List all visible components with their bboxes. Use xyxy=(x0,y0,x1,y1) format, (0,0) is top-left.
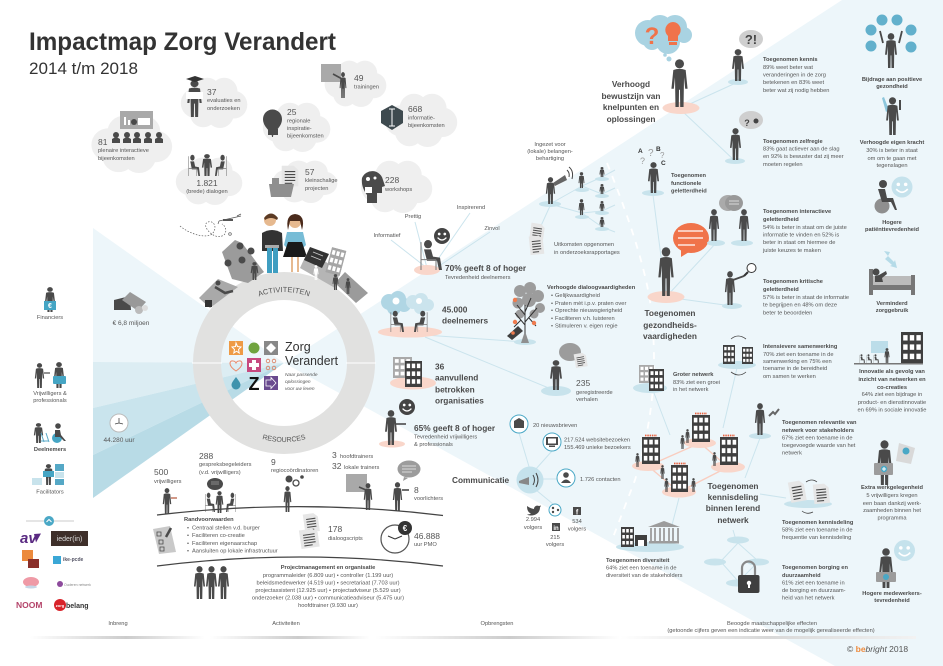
outcome: toegenomen gezondheidsvaardigheden xyxy=(643,223,709,341)
outcome: dialoogvaardigheden tree: Gelijkwaardigheid xyxy=(555,293,600,299)
outcome: toegenomen kennis: 89% weet beter wat xyxy=(763,65,813,71)
outcome: communicatie: volgers xyxy=(524,525,542,531)
societal: verminderd zorggebruik: zorggebruik xyxy=(876,308,909,314)
cloud: 668 informatiebijeenkomsten: informatie- xyxy=(408,116,435,122)
logo: Zorg Verandert: Verandert xyxy=(285,354,339,368)
outcome: ingezet belangenbehartiging: Uitkomsten opgenomen xyxy=(554,242,614,248)
178 dialoogscripts xyxy=(299,513,363,549)
outcome: functionele geletterdheid: C xyxy=(661,160,666,167)
cloud: 57 kleinschalige projecten: projecten xyxy=(305,186,328,192)
outcome: verhoogd bewustzijn: Verhoogd xyxy=(612,79,650,89)
icon: activity scene left xyxy=(199,240,264,308)
resources: 288 gespreksbegeleiders: gespreksbegeleiders xyxy=(199,462,252,468)
outcome: functionele geletterdheid xyxy=(638,146,707,196)
outcome: 70% tevredenheid deelnemers xyxy=(374,205,527,281)
resources: trainers: 3 xyxy=(332,450,337,460)
outcome: borging en duurzaamheid: de borging en duurzaam- xyxy=(782,588,846,594)
outcome: verhoogd bewustzijn xyxy=(601,15,700,124)
46.888 uur PMO xyxy=(381,521,440,553)
178 dialoogscripts: 178 xyxy=(328,524,342,534)
cloud: 25 regionale bijeenkomsten: regionale xyxy=(287,118,310,124)
resources: 9 regiocoordinatoren: regiocoördinatoren xyxy=(271,468,318,474)
outcome: dialoogvaardigheden tree xyxy=(507,282,636,345)
outcome: 65% tevredenheid vrijwilligers: Tevredenheid vrijwilligers xyxy=(414,434,477,440)
societal: verminderd zorggebruik xyxy=(869,251,915,314)
cloud: 25 regionale bijeenkomsten: bijeenkomsten xyxy=(287,134,324,140)
logos of partners: zorg xyxy=(56,603,65,608)
cloud: 57 kleinschalige projecten xyxy=(269,161,338,203)
outcome: relevantie netwerk: Toegenomen relevantie van xyxy=(782,420,857,426)
logos of partners: av xyxy=(20,530,38,547)
societal: hogere patienttevredenheid: patiënttevredenheid xyxy=(865,227,920,233)
outcome: 235 verhalen: geregistreerde xyxy=(576,390,613,396)
outcome: verhoogd bewustzijn: ? xyxy=(645,23,659,50)
societal: innovatie xyxy=(854,332,926,414)
outcome: dialoogvaardigheden tree: • xyxy=(551,324,553,330)
resources: 500 vrijwilligers: vrijwilligers xyxy=(154,479,182,485)
outcome: toegenomen diversiteit: diversiteit van de stakeholders xyxy=(606,573,683,579)
randvoorwaarden: Faciliteren eigenaarschap xyxy=(192,541,257,547)
outcome: relevantie netwerk: 67% ziet een toename in de xyxy=(782,436,853,442)
outcome: 235 verhalen xyxy=(541,343,613,403)
outcome: intensievere samenwerking: 70% ziet een toename in de xyxy=(763,352,834,358)
outcome: 45.000 deelnemers: deelnemers xyxy=(442,316,489,326)
outcome: groter netwerk xyxy=(633,365,720,393)
outcome: 70% tevredenheid deelnemers: Informatief xyxy=(374,233,401,239)
resources: 500 vrijwilligers xyxy=(154,467,182,514)
outcome: 65% tevredenheid vrijwilligers: & professionals xyxy=(414,442,453,448)
heading: kennisdeling binnen lerend netwerk: netwerk xyxy=(717,515,749,525)
ground arcs xyxy=(157,507,443,566)
background: left input fan xyxy=(93,228,284,498)
randvoorwaarden: Faciliteren co-creatie xyxy=(192,533,245,539)
outcome: kritische geletterdheid: te begrijpen en 48% om deze xyxy=(763,302,837,308)
societal: extra werkgelegenheid: een baan dankzij werk- xyxy=(863,501,921,507)
outcome: 36 organisaties: organisaties xyxy=(435,396,484,406)
input: financiers: Financiers xyxy=(37,315,63,321)
resources: 8 voorlichters: 8 xyxy=(414,485,419,495)
input: facilitators: Facilitators xyxy=(36,490,64,496)
cloud: 228 workshops xyxy=(361,161,432,213)
outcome: communicatie: 2.994 xyxy=(526,517,540,523)
cloud: 57 kleinschalige projecten: 57 xyxy=(305,167,315,177)
logo: Zorg Verandert: Zorg xyxy=(285,340,311,354)
outcome: groter netwerk: Groter netwerk xyxy=(673,372,714,378)
outcome: communicatie: 534 xyxy=(572,519,582,525)
outcome: kritische geletterdheid: Toegenomen kritische xyxy=(763,279,823,285)
outcome: intensievere samenwerking: samenwerking en 75% een xyxy=(763,359,832,365)
outcome: borging en duurzaamheid: Toegenomen borging en xyxy=(782,565,848,571)
outcome: communicatie: volgers xyxy=(546,542,564,548)
outcome: interactieve geletterdheid: juiste keuzes te maken xyxy=(762,248,821,254)
randvoorwaarden: • xyxy=(187,541,189,547)
outcome: toegenomen gezondheidsvaardigheden: vaardigheden xyxy=(643,331,697,341)
outcome: intensievere samenwerking xyxy=(718,336,838,380)
outcome: intensievere samenwerking: Intensievere samenwerking xyxy=(763,344,838,350)
footer labels: Opbrengsten xyxy=(481,621,513,627)
outcome: groter netwerk: in het netwerk xyxy=(673,387,709,393)
randvoorwaarden: Randvoorwaarden xyxy=(184,517,234,523)
outcome: toegenomen zelfregie: Toegenomen zelfregie xyxy=(763,139,823,145)
societal: bijdrage positieve gezondheid: gezondheid xyxy=(876,84,908,90)
subtitle: 2014 t/m 2018 xyxy=(29,60,138,78)
outcome: dialoogvaardigheden tree: Oprechte nieuwsgierigheid xyxy=(555,308,622,314)
outcome: relevantie netwerk xyxy=(749,403,857,456)
cloud: 37 evaluaties: 37 xyxy=(207,87,217,97)
societal: verhoogde eigen kracht: 30% is beter in staat xyxy=(866,148,918,154)
societal: innovatie: co-creaties xyxy=(877,385,907,391)
heading: kennisdeling binnen lerend netwerk: kennisdeling xyxy=(708,492,758,502)
societal: extra werkgelegenheid: 5 vrijwilligers kregen xyxy=(866,493,918,499)
resources: 288 gespreksbegeleiders: (v.d. vrijwilligers) xyxy=(199,470,241,476)
logos of partners: Ouderen netwerk xyxy=(64,583,91,587)
outcome: intensievere samenwerking: toename in de bereidheid xyxy=(763,366,827,372)
projectmanagement: hoofdtrainer (9.930 uur) xyxy=(298,603,358,609)
cloud: 49 trainingen: trainingen xyxy=(354,84,379,90)
resources: 9 regiocoordinatoren xyxy=(271,457,318,512)
resources: trainers: hoofdtrainers xyxy=(340,454,373,460)
footer gradient bar xyxy=(30,636,916,639)
outcome: functionele geletterdheid: A xyxy=(638,148,643,155)
cloud: 81 plenaire bijeenkomsten: bijeenkomsten xyxy=(98,156,135,162)
icon: drone with dashed route xyxy=(180,214,241,237)
outcome: ingezet belangenbehartiging: in onderzoeksrapportages xyxy=(554,250,620,256)
resources: 288 gespreksbegeleiders: 288 xyxy=(199,451,213,461)
logos of partners: ieder(in) xyxy=(57,536,82,543)
outcome: functionele geletterdheid: B xyxy=(656,146,661,153)
outcome: ingezet belangenbehartiging: (lokale) belangen- xyxy=(527,149,573,155)
cloud: 668 informatiebijeenkomsten: bijeenkomsten xyxy=(408,123,445,129)
outcome: kritische geletterdheid: beter te beoordelen xyxy=(763,310,812,316)
outcome: toegenomen kennis xyxy=(728,30,829,94)
outcome: ingezet belangenbehartiging: Ingezet voor xyxy=(534,142,566,148)
outcome: interactieve geletterdheid: informatie te vinden en 52% is xyxy=(763,232,839,238)
outcome: verhoogd bewustzijn: bewustzijn van xyxy=(601,91,661,101)
outcome: toegenomen gezondheidsvaardigheden: gezondheids- xyxy=(643,320,697,330)
outcome: functionele geletterdheid: ? xyxy=(648,148,654,159)
outcome: interactieve geletterdheid: geletterdheid xyxy=(763,217,799,223)
societal: verhoogde eigen kracht: Verhoogde eigen kracht xyxy=(860,140,924,146)
outcome: toegenomen kennis: beter wat zij nodig hebben xyxy=(763,88,829,94)
randvoorwaarden: • xyxy=(187,533,189,539)
outcome: toegenomen kennisdeling: 58% ziet een toename in de xyxy=(782,528,853,534)
resources: 8 voorlichters: voorlichters xyxy=(414,496,443,502)
outcome: toegenomen diversiteit: 64% ziet een toename in de xyxy=(606,566,677,572)
outcome: ingezet belangenbehartiging xyxy=(527,142,620,256)
outcome: communicatie xyxy=(452,415,631,548)
outcome: 70% tevredenheid deelnemers: Inspirerend xyxy=(457,205,485,211)
outcome: dialoogvaardigheden tree: Verhoogde dialoogvaardigheden xyxy=(547,285,636,291)
outcome: toegenomen zelfregie xyxy=(725,111,844,168)
outcome: verhoogd bewustzijn: oplossingen xyxy=(607,114,655,124)
cloud: 49 trainingen xyxy=(321,61,386,107)
societal: verhoogde eigen kracht xyxy=(860,97,924,169)
outcome: interactieve geletterdheid: beter in staat om hiermee de xyxy=(763,240,835,246)
cloud: 1.821 dialogen: 1.821 xyxy=(196,178,218,188)
outcome: functionele geletterdheid: ? xyxy=(660,151,665,160)
societal: verhoogde eigen kracht: tegenslagen xyxy=(876,163,908,169)
societal: extra werkgelegenheid: Extra werkgelegenheid xyxy=(861,485,923,491)
societal: hogere medewerkerstevredenheid: Hogere medewerkers- xyxy=(862,591,922,597)
societal: bijdrage positieve gezondheid xyxy=(862,14,922,90)
outcome: 70% tevredenheid deelnemers: Zinvol xyxy=(484,226,500,232)
input: vrijwilligers en professionals: Vrijwilligers & xyxy=(33,391,67,397)
outcome: communicatie: 1.726 contacten xyxy=(580,477,620,483)
cloud: 37 evaluaties xyxy=(181,76,247,128)
icon: activity scene right xyxy=(300,247,368,303)
ring: activiteiten and resources: RESOURCES xyxy=(262,434,306,442)
projectmanagement: onderzoeker (2.038 uur) • communicatieadviseur (5.475 uur) xyxy=(252,596,404,602)
outcome: interactieve geletterdheid: Toegenomen interactieve xyxy=(763,209,831,215)
randvoorwaarden: Centraal stellen v.d. burger xyxy=(192,526,260,532)
footer labels: Inbreng xyxy=(108,621,128,627)
projectmanagement: beleidsmedewerker (4.519 uur) • secretariaat (7.703 uur) xyxy=(256,580,400,586)
societal: hogere medewerkerstevredenheid: tevredenheid xyxy=(874,598,910,604)
cloud: 81 plenaire bijeenkomsten xyxy=(91,111,172,173)
projectmanagement: Projectmanagement en organisatie xyxy=(281,565,375,571)
outcome: borging en duurzaamheid xyxy=(704,536,848,602)
cloud: 1.821 dialogen xyxy=(176,154,242,205)
heading: kennisdeling binnen lerend netwerk: Toegenomen xyxy=(707,481,759,491)
societal: innovatie: 64% ziet een bijdrage in xyxy=(862,392,922,398)
outcome: 36 organisaties: betrokken xyxy=(435,384,475,394)
outcome: 235 verhalen: 235 xyxy=(576,378,590,388)
societal: innovatie: inzicht van netwerken en xyxy=(858,377,926,383)
input: deelnemers xyxy=(34,423,66,453)
outcome: 65% tevredenheid vrijwilligers: 65% geeft 8 of hoger xyxy=(414,423,496,433)
outcome: communicatie: 20 nieuwsbrieven xyxy=(533,423,577,429)
footer labels xyxy=(108,621,875,634)
cloud: 49 trainingen: 49 xyxy=(354,73,364,83)
logos of partners: ike-pcde xyxy=(63,557,84,563)
outcome: borging en duurzaamheid: duurzaamheid xyxy=(782,573,821,579)
cloud: 1.821 dialogen: (brede) dialogen xyxy=(186,189,228,195)
outcome: 36 organisaties: aanvullend xyxy=(435,372,478,382)
outcome: toegenomen diversiteit xyxy=(606,521,684,579)
cloud: 668 informatiebijeenkomsten: 668 xyxy=(408,104,422,114)
logo: Zorg Verandert: oplossingen xyxy=(285,379,311,385)
projectmanagement: projectassistent (12.925 uur) • projectadviseur (5.529 uur) xyxy=(255,588,401,594)
outcome: interactieve geletterdheid: 54% is beter in staat om de juiste xyxy=(763,225,847,231)
logo: Zorg Verandert: Naar passende xyxy=(285,372,318,378)
projectmanagement: programmaleider (6.809 uur) • controller (1.199 uur) xyxy=(263,573,393,579)
outcome: toegenomen kennisdeling: frequentie van kennisdeling xyxy=(782,535,851,541)
outcome: toegenomen zelfregie: ? xyxy=(744,118,750,128)
resources: 500 vrijwilligers: 500 xyxy=(154,467,168,477)
ring: activiteiten and resources: ACTIVITEITEN xyxy=(258,286,310,296)
logos of partners: belang xyxy=(66,603,89,610)
outcome: borging en duurzaamheid: heid van het netwerk xyxy=(782,596,835,602)
outcome: kritische geletterdheid: 57% is beter in staat de informatie xyxy=(763,295,849,301)
outcome: borging en duurzaamheid: 61% ziet een toename in xyxy=(782,580,845,586)
resources: trainers: lokale trainers xyxy=(344,465,380,471)
outcome: 36 organisaties: 36 xyxy=(435,362,445,372)
societal: bijdrage positieve gezondheid: Bijdrage aan positieve xyxy=(862,77,922,83)
cloud: 81 plenaire bijeenkomsten: plenaire interactieve xyxy=(98,148,149,154)
footer labels: Activiteiten xyxy=(272,621,300,627)
randvoorwaarden: • xyxy=(187,548,189,554)
178 dialoogscripts: dialoogscripts xyxy=(328,536,363,542)
icon: couple on the ring xyxy=(262,214,307,273)
outcome: 70% tevredenheid deelnemers: 70% geeft 8 of hoger xyxy=(445,263,527,273)
outcome: interactieve geletterdheid xyxy=(707,195,847,254)
outcome: kritische geletterdheid xyxy=(722,264,849,316)
randvoorwaarden xyxy=(153,517,278,554)
outcome: dialoogvaardigheden tree: • xyxy=(551,316,553,322)
input: facilitators xyxy=(32,464,64,496)
input: 6,8 miljoen: € 6,8 miljoen xyxy=(113,320,150,327)
outcome: toegenomen diversiteit: Toegenomen diversiteit xyxy=(606,558,670,564)
cloud: 228 workshops: workshops xyxy=(384,187,412,193)
outcome: toegenomen kennis: betekenen en 83% weet xyxy=(763,80,824,86)
societal: extra werkgelegenheid xyxy=(861,440,923,522)
outcome: relevantie netwerk: netwerk xyxy=(782,450,802,456)
white dashed route xyxy=(607,163,654,540)
societal: verminderd zorggebruik: Verminderd xyxy=(876,301,908,307)
outcome: communicatie: Communicatie xyxy=(452,475,510,485)
input: 44.280 uur: 44.280 uur xyxy=(103,437,135,444)
societal: hogere patienttevredenheid xyxy=(865,176,920,233)
input: 44.280 uur xyxy=(103,414,135,444)
input: vrijwilligers en professionals xyxy=(33,362,67,404)
outcome: dialoogvaardigheden tree: • xyxy=(551,301,553,307)
outcome: 45.000 deelnemers xyxy=(378,291,489,338)
societal: extra werkgelegenheid: programma xyxy=(877,516,907,522)
outcome: communicatie: 217.524 websitebezoeken xyxy=(564,438,630,444)
randvoorwaarden: Aansluiten op lokale infrastructuur xyxy=(192,548,278,554)
outcome: relevantie netwerk: toegevoegde waarde van het xyxy=(782,443,856,449)
outcome: relevantie netwerk: netwerk voor stakeholders xyxy=(782,428,854,434)
outcome: toegenomen kennisdeling xyxy=(782,480,854,541)
societal: hogere patienttevredenheid: Hogere xyxy=(882,220,902,226)
logo: Zorg Verandert: Z xyxy=(248,374,260,394)
outcome: functionele geletterdheid: Toegenomen xyxy=(671,173,706,179)
outcome: toegenomen gezondheidsvaardigheden: Toegenomen xyxy=(644,308,696,318)
outcome: dialoogvaardigheden tree: Praten mèt i.p.v. praten over xyxy=(555,301,626,307)
network of organisations xyxy=(632,414,745,498)
societal: verhoogde eigen kracht: om om te gaan met xyxy=(868,156,917,162)
outcome: dialoogvaardigheden tree: • xyxy=(551,308,553,314)
outcome: communicatie: 215 xyxy=(550,535,560,541)
resources: 8 voorlichters xyxy=(393,460,443,511)
outcome: toegenomen zelfregie: en 92% is bewuster dat zij meer xyxy=(763,154,844,160)
outcome: 70% tevredenheid deelnemers: Tevredenheid deelnemers xyxy=(445,275,511,281)
societal: extra werkgelegenheid: zaamheden binnen het xyxy=(863,508,921,514)
copyright bebright: © bebright 2018 xyxy=(847,644,908,654)
resources: 9 regiocoordinatoren: 9 xyxy=(271,457,276,467)
outcome: functionele geletterdheid: geletterdheid xyxy=(671,188,707,194)
cloud: 25 regionale bijeenkomsten: 25 xyxy=(287,107,297,117)
societal: innovatie: product- en dienstinnovatie xyxy=(858,400,926,406)
heading: kennisdeling binnen lerend netwerk xyxy=(706,481,760,525)
outcome: 36 organisaties xyxy=(390,357,484,406)
outcome: intensievere samenwerking: om samen te werken xyxy=(763,374,816,380)
heading: kennisdeling binnen lerend netwerk: binnen lerend xyxy=(706,503,760,513)
projectmanagement xyxy=(194,565,404,609)
input: financiers xyxy=(37,287,63,321)
outcome: toegenomen kennis: Toegenomen kennis xyxy=(763,57,818,63)
46.888 uur PMO: uur PMO xyxy=(414,542,437,548)
randvoorwaarden: • xyxy=(187,526,189,532)
outcome: toegenomen kennis: veranderingen in de zorg xyxy=(763,72,826,78)
cloud: 57 kleinschalige projecten: kleinschalige xyxy=(305,178,338,184)
footer labels: Beoogde maatschappelijke effecten xyxy=(727,621,817,627)
outcome: 45.000 deelnemers: 45.000 xyxy=(442,304,468,314)
cloud: 228 workshops: 228 xyxy=(385,175,399,185)
outcome: toegenomen kennisdeling: Toegenomen kennisdeling xyxy=(782,520,854,526)
input: deelnemers: Deelnemers xyxy=(34,447,66,453)
logo: Zorg Verandert xyxy=(229,340,339,394)
input: 6,8 miljoen xyxy=(113,292,150,327)
ring: activiteiten and resources xyxy=(192,272,376,454)
outcome: toegenomen zelfregie: 83% gaat actiever aan de slag xyxy=(763,146,840,152)
resources: trainers: 32 xyxy=(332,461,342,471)
outcome: kritische geletterdheid: geletterdheid xyxy=(763,287,799,293)
cloud: 25 regionale bijeenkomsten xyxy=(263,103,330,152)
outcome: toegenomen zelfregie: moeten regelen xyxy=(763,162,803,168)
societal: innovatie: en 69% in sociale innovatie xyxy=(858,408,926,414)
logos of partners: NOOM xyxy=(16,600,42,610)
cloud: 37 evaluaties: evaluaties en xyxy=(207,98,241,104)
input: vrijwilligers en professionals: professionals xyxy=(33,398,67,404)
outcome: functionele geletterdheid: functionele xyxy=(671,181,701,187)
connector lines xyxy=(391,82,786,580)
resources: trainers xyxy=(332,450,380,510)
cloud: 25 regionale bijeenkomsten: inspiratie- xyxy=(287,126,312,132)
logo: Zorg Verandert: voor uw leven xyxy=(285,386,315,392)
footer labels: (getoonde cijfers geven een indicatie weer van de mogelijk gerealiseerde effecten) xyxy=(667,628,875,634)
outcome: dialoogvaardigheden tree: Faciliteren v.h. luisteren xyxy=(555,316,615,322)
outcome: ingezet belangenbehartiging: behartiging xyxy=(536,156,564,162)
outcome: verhoogd bewustzijn: knelpunten en xyxy=(603,102,659,112)
outcome: dialoogvaardigheden tree: • xyxy=(551,293,553,299)
input: financiers: € xyxy=(48,303,52,310)
title: Impactmap Zorg Verandert xyxy=(29,28,337,56)
outcome: 235 verhalen: verhalen xyxy=(576,397,598,403)
cloud: 81 plenaire bijeenkomsten: 81 xyxy=(98,137,108,147)
outcome: dialoogvaardigheden tree: Stimuleren v. eigen regie xyxy=(555,324,618,330)
societal: hogere medewerkerstevredenheid xyxy=(862,540,922,604)
outcome: communicatie: f xyxy=(576,510,579,516)
cloud: 668 informatiebijeenkomsten xyxy=(381,94,457,147)
background: right outcome area xyxy=(284,0,943,666)
outcome: 65% tevredenheid vrijwilligers xyxy=(379,399,496,448)
outcome: communicatie: 155.469 unieke bezoekers xyxy=(564,445,631,451)
outcome: 70% tevredenheid deelnemers: Prettig xyxy=(405,214,421,220)
cloud: 37 evaluaties: onderzoeken xyxy=(207,106,240,112)
outcome: communicatie: in xyxy=(553,526,559,532)
societal: innovatie: Innovatie als gevolg van xyxy=(859,369,925,375)
outcome: functionele geletterdheid: ? xyxy=(640,156,645,166)
46.888 uur PMO: 46.888 xyxy=(414,531,440,541)
logos of partners xyxy=(16,516,91,611)
outcome: toegenomen kennis: ?! xyxy=(745,32,757,47)
outcome: communicatie: volgers xyxy=(568,526,586,532)
resources: 288 gespreksbegeleiders xyxy=(199,451,252,513)
46.888 uur PMO: € xyxy=(403,524,408,533)
outcome: groter netwerk: 83% ziet een groei xyxy=(673,380,720,386)
